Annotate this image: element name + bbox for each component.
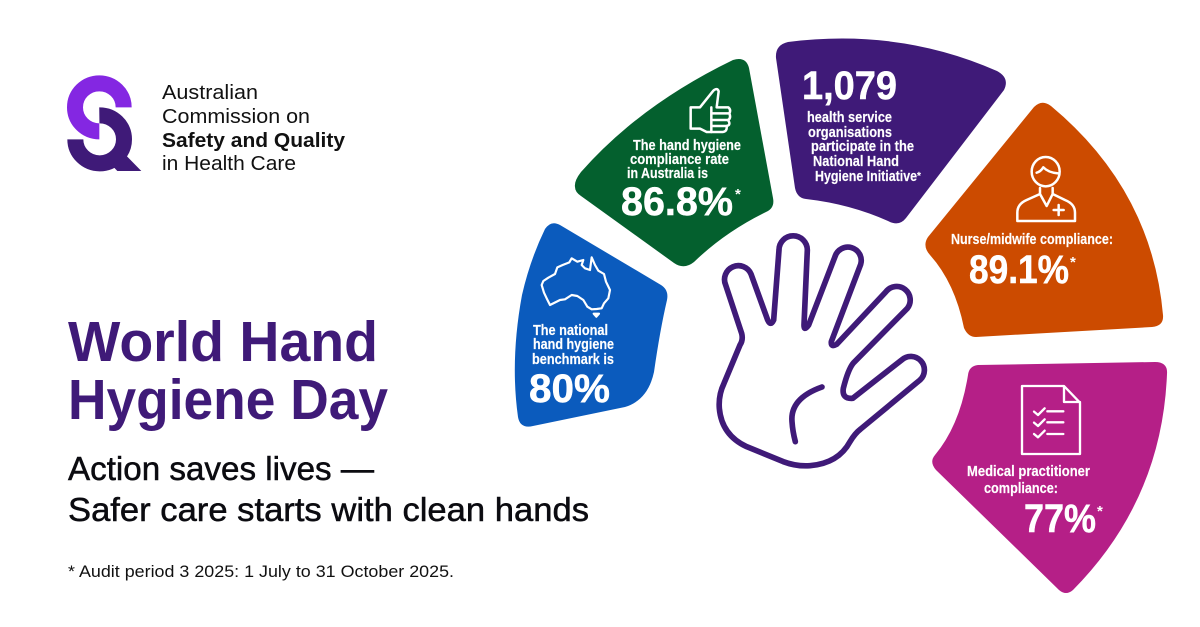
compliance rate label: compliance rate — [630, 152, 729, 168]
benchmark label — [532, 323, 614, 368]
icon: open hand outline — [719, 236, 924, 466]
participating organisations value: 1,079 — [802, 64, 897, 108]
panel: compliance rate — [575, 59, 773, 266]
panel: nurse and midwife compliance: * — [1070, 254, 1076, 271]
participating organisations label: organisations — [808, 125, 892, 141]
title: Hygiene Day — [68, 368, 388, 432]
panel: medical practitioner compliance: * — [1097, 503, 1103, 520]
compliance rate label: The hand hygiene — [633, 138, 741, 154]
panel: medical practitioner compliance — [932, 362, 1167, 593]
participating organisations label: participate in the — [811, 139, 914, 155]
panel: compliance rate: * — [735, 186, 741, 203]
logo wordmark: Australian — [162, 82, 258, 104]
panel: national benchmark — [515, 223, 667, 427]
medical practitioner label — [967, 464, 1090, 497]
participating organisations label: Hygiene Initiative — [815, 169, 917, 185]
nurse and midwife label: Nurse/midwife compliance: — [951, 232, 1113, 248]
logo wordmark — [162, 82, 346, 175]
subtitle — [68, 450, 589, 528]
title: World Hand — [68, 310, 378, 374]
subtitle: Safer care starts with clean hands — [68, 491, 589, 528]
logo — [75, 82, 346, 175]
icon: thumbs up — [691, 89, 730, 132]
benchmark label: hand hygiene — [533, 337, 614, 353]
icon: checklist document — [1022, 386, 1080, 454]
compliance rate value: 86.8% — [621, 180, 733, 224]
icon: map of Australia — [542, 257, 610, 317]
benchmark label: benchmark is — [532, 352, 614, 368]
panel: participating organisations — [776, 39, 1006, 223]
panel: nurse and midwife compliance — [925, 103, 1163, 337]
logo mark — [75, 83, 141, 171]
medical practitioner label: compliance: — [984, 481, 1058, 497]
benchmark label: The national — [533, 323, 608, 339]
compliance rate label — [627, 138, 741, 182]
benchmark value: 80% — [529, 367, 610, 411]
nurse and midwife value: 89.1% — [969, 248, 1069, 292]
footnote: * Audit period 3 2025: 1 July to 31 October 2025. — [68, 563, 454, 581]
participating organisations label — [807, 110, 921, 185]
subtitle: Action saves lives — — [68, 450, 374, 487]
medical practitioner value: 77% — [1024, 497, 1096, 541]
participating organisations label: National Hand — [813, 154, 899, 170]
logo wordmark: in Health Care — [162, 153, 296, 175]
medical practitioner label: Medical practitioner — [967, 464, 1090, 480]
logo wordmark: Safety and Quality — [162, 130, 346, 152]
compliance rate label: in Australia is — [627, 166, 708, 182]
participating organisations label: health service — [807, 110, 892, 126]
title — [68, 310, 388, 432]
icon: nurse — [1017, 157, 1075, 221]
participating organisations label: * — [917, 171, 921, 182]
logo wordmark: Commission on — [162, 106, 310, 128]
